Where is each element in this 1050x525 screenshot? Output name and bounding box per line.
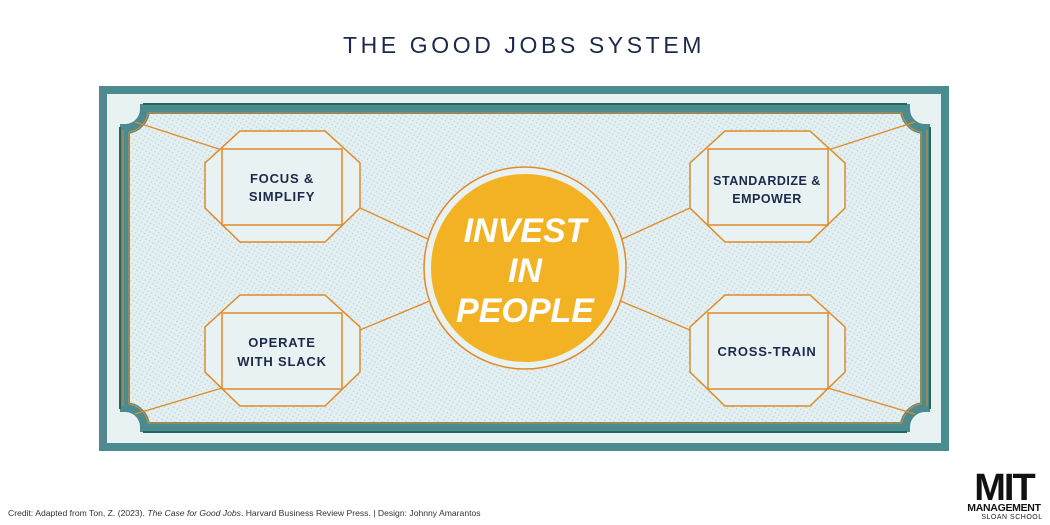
panel: frame [99, 86, 949, 451]
logo: MIT Sloan: MIT [974, 467, 1035, 509]
logo: MIT Sloan [967, 467, 1043, 521]
panel: operate with slack: OPERATE [248, 335, 316, 350]
logo: MIT Sloan: SLOAN SCHOOL [981, 514, 1043, 521]
panel: standardize & empower: STANDARDIZE & [713, 174, 821, 188]
center circle: invest in people: PEOPLE [456, 292, 595, 330]
logo: MIT Sloan: MANAGEMENT [967, 502, 1042, 514]
panel: standardize & empower [690, 131, 845, 242]
panel: focus & simplify: FOCUS & [250, 171, 314, 186]
center circle: invest in people: IN [508, 252, 543, 290]
panel: focus & simplify [205, 131, 360, 242]
center circle: invest in people [424, 167, 626, 369]
center circle: invest in people: INVEST [464, 212, 590, 250]
connector lines [135, 122, 915, 414]
panel: operate with slack [205, 295, 360, 406]
title: THE GOOD JOBS SYSTEM [343, 32, 705, 58]
panel: operate with slack: WITH SLACK [237, 354, 327, 369]
panel: cross-train [690, 295, 845, 406]
panel: standardize & empower: EMPOWER [732, 192, 802, 206]
panel: focus & simplify: SIMPLIFY [249, 189, 315, 204]
credit text: Credit: Adapted from Ton, Z. (2023). The Case for Good Jobs. Harvard Business Review Press. | Design: Johnny Amarantos [8, 508, 481, 518]
panel: cross-train: CROSS-TRAIN [717, 344, 817, 359]
